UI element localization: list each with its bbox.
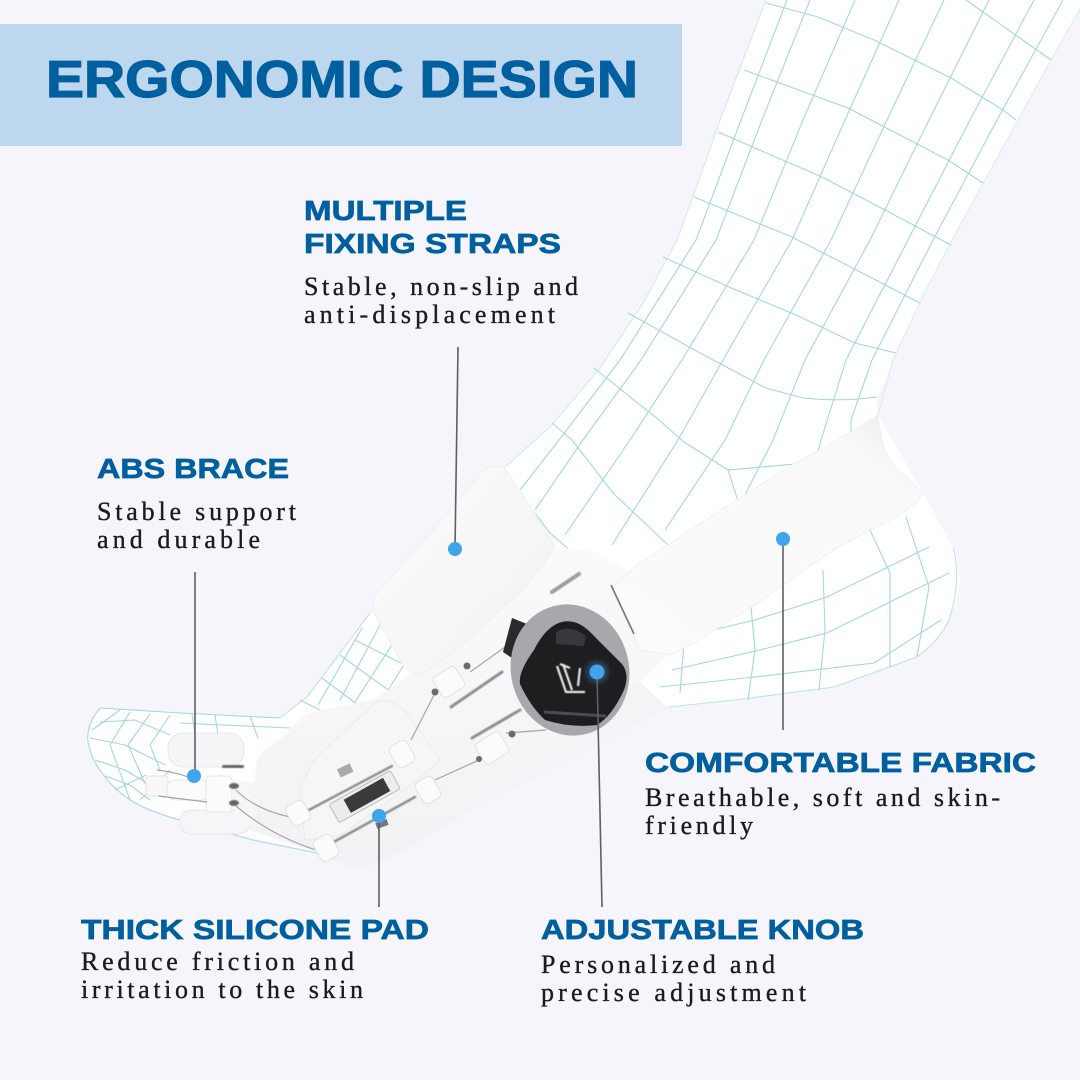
callout: adjustable knob — [541, 661, 864, 1007]
clip pins — [432, 662, 516, 762]
lower wing under knob — [498, 682, 668, 788]
dorsum mesh — [280, 613, 370, 718]
heel mesh — [668, 547, 957, 707]
callout: comfortable fabric — [645, 532, 1036, 840]
callout: abs brace: ABS BRACE — [97, 453, 289, 484]
adjustable knob — [497, 592, 643, 748]
knob logo — [557, 664, 585, 692]
toe clip — [206, 776, 232, 812]
toe bar — [167, 780, 209, 800]
thin wires — [157, 640, 546, 850]
callout: multiple fixing straps — [304, 195, 578, 556]
callout: thick silicone pad: THICK SILICONE PAD — [81, 914, 429, 945]
callout: abs brace: and durable — [97, 525, 260, 554]
leg outline — [502, 0, 766, 470]
toe tip clip — [146, 776, 168, 796]
callout: adjustable knob: Personalized and — [541, 950, 775, 979]
callout: multiple fixing straps: anti-displacement — [304, 300, 556, 329]
callout: multiple fixing straps: FIXING STRAPS — [304, 228, 561, 259]
small window — [337, 763, 353, 777]
toe pad top — [168, 733, 244, 767]
callout: thick silicone pad: Reduce friction and — [81, 947, 354, 976]
callout: comfortable fabric: COMFORTABLE FABRIC — [645, 747, 1036, 778]
callout: adjustable knob: precise adjustment — [541, 978, 807, 1007]
lower tab — [375, 819, 389, 829]
title: ERGONOMIC DESIGN — [46, 51, 638, 109]
callout: comfortable fabric: Breathable, soft and skin- — [645, 783, 1000, 812]
forefoot panel — [300, 701, 440, 840]
clips — [284, 665, 510, 863]
toe mesh — [88, 708, 317, 853]
long lines — [520, 0, 787, 490]
toe pad bottom — [180, 810, 250, 834]
callout: abs brace — [97, 453, 297, 783]
foot wireframe — [88, 0, 1080, 856]
long fabric strap — [612, 415, 923, 655]
callout: multiple fixing straps: Stable, non-slip and — [304, 272, 578, 301]
callout: thick silicone pad — [81, 809, 429, 1004]
callout: thick silicone pad: irritation to the skin — [81, 975, 363, 1004]
callout: multiple fixing straps: MULTIPLE — [304, 195, 467, 226]
illustration: foot mesh with brace — [88, 0, 1080, 866]
latch — [503, 618, 527, 662]
hub edge slit — [611, 585, 634, 634]
toe hooks — [222, 765, 244, 806]
steel rods — [307, 574, 579, 843]
brace main plate — [146, 548, 668, 866]
top fixing strap pad — [373, 466, 555, 674]
slide slot — [329, 770, 400, 823]
cross lines — [966, 0, 1051, 60]
callout: abs brace: Stable support — [97, 497, 297, 526]
callout: adjustable knob: ADJUSTABLE KNOB — [541, 914, 864, 945]
callout: comfortable fabric: friendly — [645, 811, 753, 840]
title banner — [0, 24, 682, 146]
